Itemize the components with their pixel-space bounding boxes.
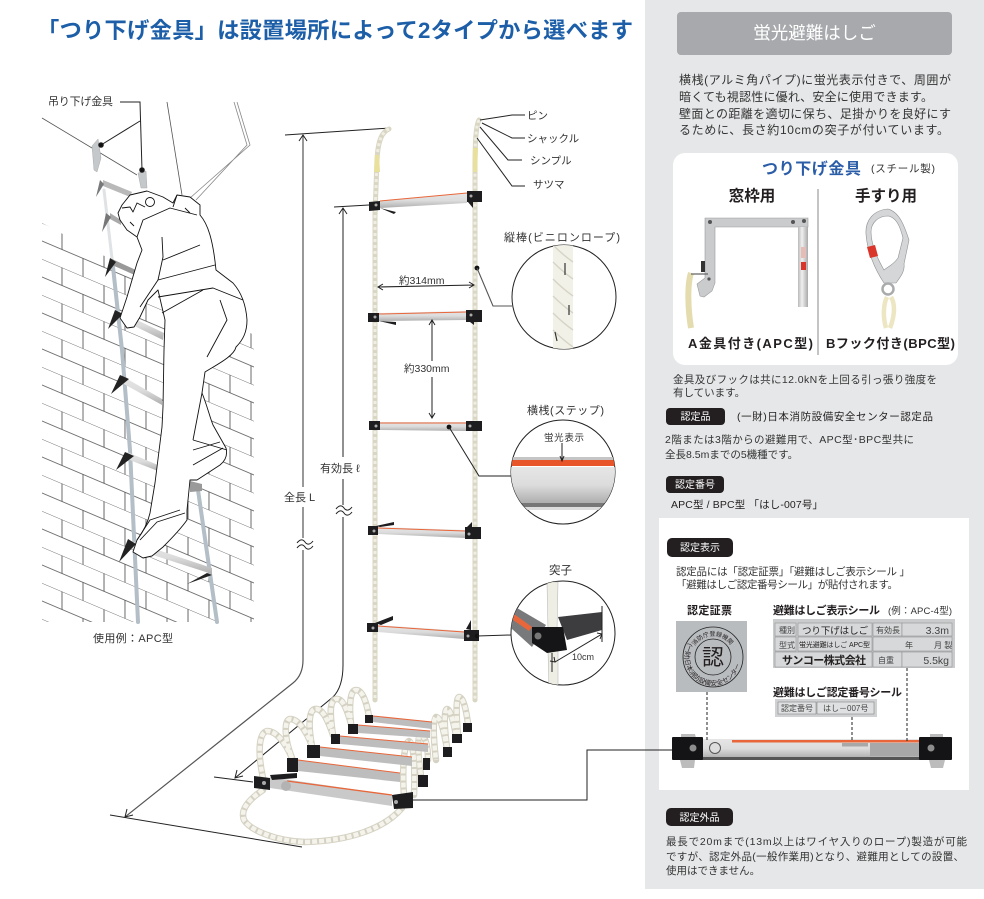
badge: certification display xyxy=(667,538,733,557)
callout: vertical rope: 縦棒(ビニロンロープ) xyxy=(504,230,620,244)
folded rope loops and steps xyxy=(243,690,472,842)
not certified text: 最長で20mまで(13m以上はワイヤ入りのロープ)製造が可能 xyxy=(666,835,968,848)
ladder rails xyxy=(104,190,217,622)
labels: rope top parts: ピン xyxy=(527,110,548,122)
ladder steps xyxy=(96,180,212,584)
certification text: 認定品には「認定証票」「避難はしご表示シール 」 xyxy=(676,565,910,578)
callout: step fluorescent marker: 蛍光表示 xyxy=(544,432,584,444)
badge: not certified xyxy=(666,808,733,826)
intro text: るために、長さ約10cmの突子が付いています。 xyxy=(679,122,949,137)
dashed leaders xyxy=(707,668,907,741)
panel: usage illustration xyxy=(42,95,254,645)
label: effective length: 有効長 ℓ xyxy=(320,461,360,475)
sidebar header xyxy=(677,12,952,55)
certificate stamp: 認定証票 xyxy=(687,604,732,617)
display seal: 月 製 xyxy=(934,640,952,650)
certification text: 「避難はしご認定番号シール」が貼付されます。 xyxy=(676,578,898,591)
badge: certified: 認定品 xyxy=(680,411,710,423)
callout: protrusion: 10cm xyxy=(572,652,594,662)
card: hanging fittings: つり下げ金具 xyxy=(762,159,861,178)
dimension: rung width: 約314mm xyxy=(399,274,445,287)
hanging hooks xyxy=(92,139,147,188)
title: 「つり下げ金具」は設置場所によって2タイプから選べます xyxy=(37,18,633,43)
labels: rope top parts: サツマ xyxy=(533,179,564,191)
intro text xyxy=(679,72,951,137)
ropes xyxy=(374,120,479,700)
card: hanging fittings: Bフック付き(BPC型) xyxy=(826,336,955,351)
callout: vertical rope xyxy=(475,230,620,355)
not certified text xyxy=(666,835,968,877)
display seal xyxy=(773,603,955,668)
strength note: 金具及びフックは共に12.0kNを上回る引っ張り強度を xyxy=(673,373,937,386)
usage note: 2階または3階からの避難用で、APC型･BPC型共に xyxy=(665,433,914,446)
card: hanging fittings: 手すり用 xyxy=(855,186,917,205)
display seal: 型式 xyxy=(779,640,795,650)
caption: 使用例：APC型 xyxy=(93,631,173,645)
label: hanging fittings: 吊り下げ金具 xyxy=(48,95,113,108)
brick wall xyxy=(42,223,254,622)
card: hanging fittings xyxy=(673,153,958,365)
icon: railing hook xyxy=(866,209,909,328)
badge: certification number xyxy=(666,476,724,493)
panel: dimension lines xyxy=(110,128,390,847)
panel: certification display xyxy=(659,518,969,790)
display seal: サンコー株式会社 xyxy=(782,653,866,667)
roof and window lines xyxy=(42,102,250,200)
card: hanging fittings: A金具付き(APC型) xyxy=(688,336,813,351)
badge: certified xyxy=(666,408,725,425)
callout: step fluorescent marker: 横桟(ステップ) xyxy=(527,403,604,417)
certified text: (一財)日本消防設備安全センター認定品 xyxy=(737,410,933,423)
display seal: 5.5kg xyxy=(923,655,949,667)
dimension: rung spacing: 約330mm xyxy=(404,362,450,375)
certification text xyxy=(676,565,910,591)
display seal: (例：APC-4型) xyxy=(888,605,952,617)
display seal: 有効長 xyxy=(876,625,900,635)
certification number seal xyxy=(773,685,902,717)
ladder photo xyxy=(243,120,482,842)
callout: step fluorescent marker xyxy=(447,403,615,524)
not certified text: ですが、認定外品(一般作業用)となり、避難用としての設置、 xyxy=(666,850,964,863)
labels: rope top parts: シンプル xyxy=(530,155,572,167)
display seal: 避難はしご表示シール xyxy=(773,603,880,617)
step 5 xyxy=(367,616,479,641)
intro text: 横桟(アルミ角パイプ)に蛍光表示付きで、周囲が xyxy=(679,72,951,87)
labels: rope top parts xyxy=(477,110,579,191)
certification number seal: 認定番号 xyxy=(781,703,813,713)
step 4 xyxy=(368,522,481,539)
intro text: 暗くても視認性に優れ、安全に使用できます。 xyxy=(679,89,933,104)
icon: window frame bracket xyxy=(688,218,808,328)
strength note: 有しています。 xyxy=(673,386,745,399)
certificate stamp: 消防庁登録機関 xyxy=(691,630,734,646)
leader: hanging fittings xyxy=(99,102,144,172)
step 3 xyxy=(369,421,482,431)
callout: protrusion: 突子 xyxy=(549,564,572,577)
not certified text: 使用はできません。 xyxy=(666,864,760,877)
step 1 xyxy=(369,191,482,214)
strength note xyxy=(673,373,937,399)
display seal: 年 xyxy=(905,640,913,650)
display seal: 種別 xyxy=(779,625,795,635)
display seal: 蛍光避難はしご APC型 xyxy=(799,640,870,649)
leader: folded ladder to product bar xyxy=(413,750,672,800)
display seal: 3.3m xyxy=(926,625,949,637)
badge: certification number: 認定番号 xyxy=(675,479,715,491)
labels: rope top parts: シャックル xyxy=(527,133,579,145)
sidebar header: 蛍光避難はしご xyxy=(753,23,876,43)
certificate stamp xyxy=(676,604,747,692)
card: hanging fittings: 窓枠用 xyxy=(729,186,775,205)
product bar with labels xyxy=(672,734,952,768)
usage note xyxy=(665,433,914,461)
usage note: 全長8.5mまでの5機種です。 xyxy=(665,448,798,461)
display seal: 自重 xyxy=(878,655,894,665)
display seal: つり下げはしご xyxy=(802,625,868,637)
climbing person xyxy=(118,191,247,558)
callout: protrusion xyxy=(475,564,615,690)
step 2 xyxy=(368,310,482,325)
certification number seal: はし－007号 xyxy=(823,704,868,713)
badge: not certified: 認定外品 xyxy=(680,812,720,824)
certificate stamp: 認 xyxy=(702,645,724,670)
sidebar xyxy=(645,0,984,889)
label: overall length: 全長 L xyxy=(284,490,315,504)
certification number text: APC型 / BPC型 「はし-007号」 xyxy=(671,498,823,511)
dimension: rung width xyxy=(378,274,474,290)
intro text: 壁面との距離を適切に保ち、足掛かりを良好にす xyxy=(679,106,951,121)
dimension: rung spacing xyxy=(404,320,450,418)
certification number seal: 避難はしご認定番号シール xyxy=(773,685,902,699)
certificate stamp: (一財)日本消防設備安全センター xyxy=(684,644,738,686)
badge: certification display: 認定表示 xyxy=(680,542,720,554)
card: hanging fittings: (スチール製) xyxy=(871,162,935,175)
